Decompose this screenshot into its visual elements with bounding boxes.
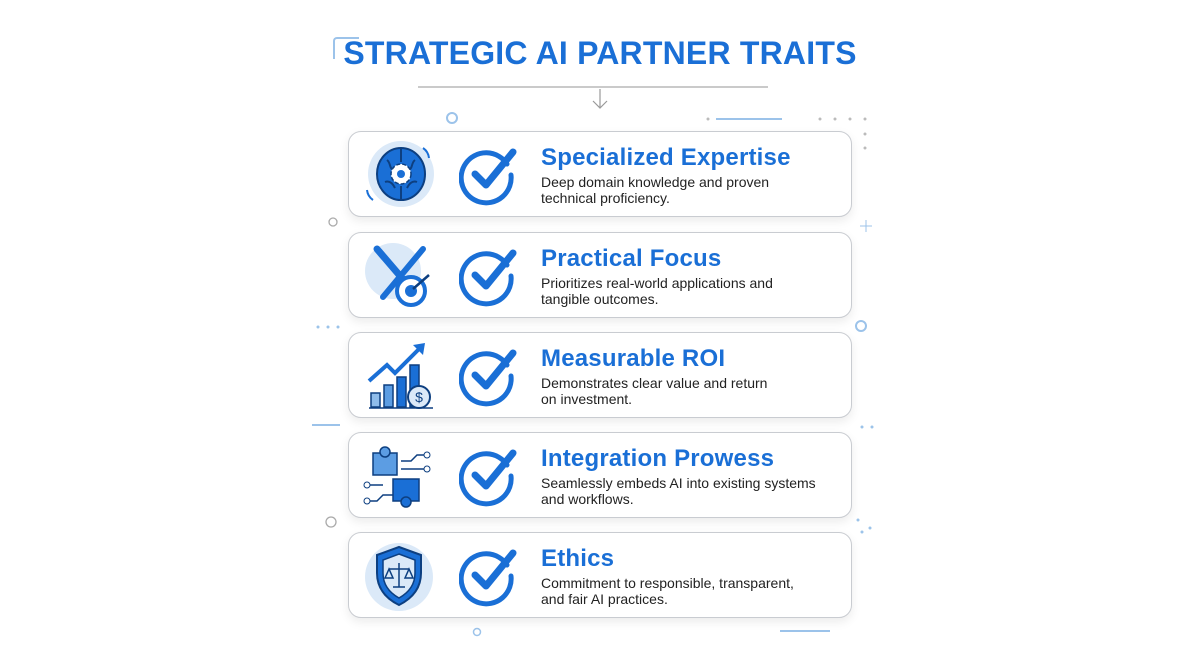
- text: tangible outcomes.: [541, 291, 659, 307]
- icon: check: [459, 450, 516, 506]
- icon: growth chart: [368, 343, 433, 409]
- text: Seamlessly embeds AI into existing systems: [541, 475, 816, 491]
- text: [541, 575, 794, 607]
- heading: Practical Focus: [541, 245, 721, 272]
- icon: check: [459, 350, 516, 406]
- text: [541, 375, 767, 407]
- heading: Ethics: [541, 545, 614, 572]
- card: Measurable ROI: [348, 332, 852, 418]
- text: technical proficiency.: [541, 190, 670, 206]
- card: Integration Prowess: [348, 432, 852, 518]
- title bracket decoration: [333, 37, 359, 59]
- icon: check: [459, 550, 516, 606]
- icon: check: [459, 250, 516, 306]
- card: Specialized Expertise: [348, 131, 852, 217]
- text: Commitment to responsible, transparent,: [541, 575, 794, 591]
- text: Prioritizes real-world applications and: [541, 275, 773, 291]
- text: Deep domain knowledge and proven: [541, 174, 769, 190]
- heading: Measurable ROI: [541, 345, 725, 372]
- text: [541, 475, 816, 507]
- icon: growth chart: $: [415, 389, 423, 405]
- text: and fair AI practices.: [541, 591, 668, 607]
- text: [541, 174, 769, 206]
- card: Ethics: [348, 532, 852, 618]
- icon: tools target: [365, 243, 430, 307]
- text: Demonstrates clear value and return: [541, 375, 767, 391]
- text: and workflows.: [541, 491, 634, 507]
- icon: shield scales: [365, 543, 433, 611]
- heading: Specialized Expertise: [541, 144, 791, 171]
- icon: brain gear: [366, 141, 434, 207]
- text: on investment.: [541, 391, 632, 407]
- text: [541, 275, 773, 307]
- arrow: title to list: [418, 86, 768, 109]
- card: Practical Focus: [348, 232, 852, 318]
- icon: check: [459, 148, 516, 206]
- title: STRATEGIC AI PARTNER TRAITS: [343, 35, 857, 71]
- icon: puzzle: [364, 446, 430, 508]
- heading: Integration Prowess: [541, 445, 774, 472]
